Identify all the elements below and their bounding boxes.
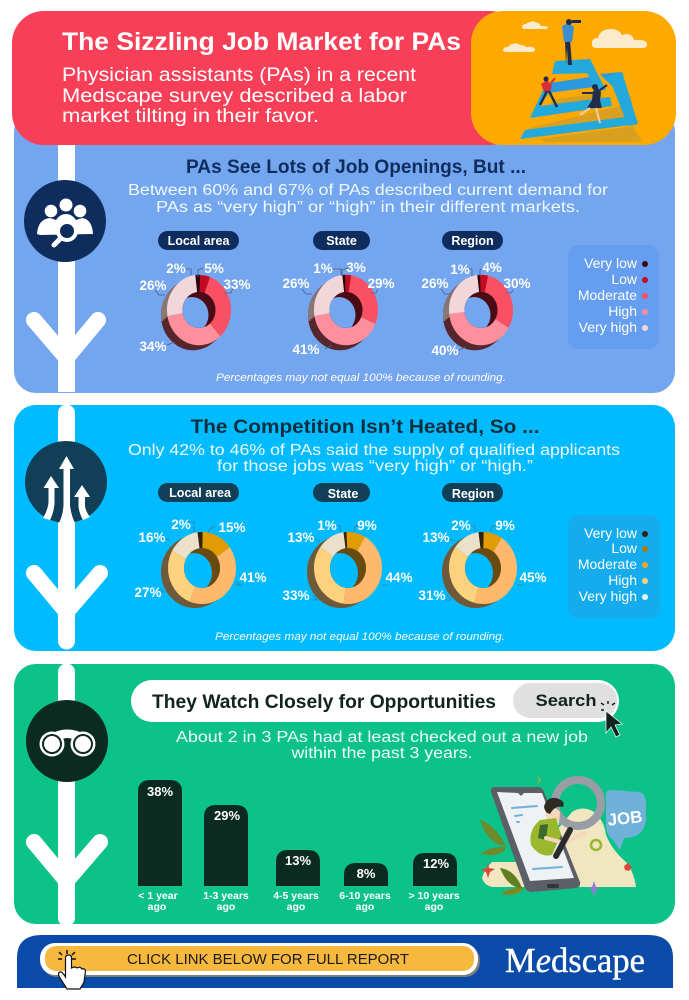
heading: job openings: PAs See Lots of Job Openings, But ... — [186, 157, 526, 178]
donut chart: state demand: State — [326, 234, 357, 248]
bar: 6 to 10 years — [339, 863, 391, 913]
legend: demand — [568, 245, 659, 349]
icon: people with magnifier — [24, 180, 106, 262]
panel: watching for opportunities — [14, 664, 675, 924]
text: checking out jobs: within the past 3 years. — [290, 745, 472, 762]
panel: competition — [14, 405, 675, 651]
donut chart: region demand: 26% — [421, 276, 449, 291]
donut chart: state demand: 3% — [346, 260, 366, 275]
text: demand description: Between 60% and 67% of PAs described current demand for — [128, 182, 608, 199]
panel: footer call to action — [17, 935, 673, 989]
bar: 4 to 5 years: ago — [287, 901, 305, 913]
footnote: rounding: Percentages may not equal 100% because of rounding. — [216, 372, 506, 384]
donut chart: region supply: 9% — [495, 518, 515, 533]
donut chart: state supply: 44% — [385, 570, 413, 585]
button: click link: CLICK LINK BELOW FOR FULL REPORT — [127, 952, 409, 968]
bar: more than 10 years: ago — [425, 901, 443, 913]
bar: 4 to 5 years: 13% — [285, 853, 311, 868]
text: demand description: PAs as “very high” or “high” in their different markets. — [156, 199, 580, 216]
legend: supply — [568, 515, 660, 618]
legend: demand: Moderate — [578, 287, 637, 303]
legend: supply: Very low — [584, 525, 638, 541]
donut chart: local area supply — [134, 483, 267, 602]
donut chart: state supply: State — [328, 487, 358, 501]
donut chart: state demand: 1% — [313, 261, 333, 276]
text: intro — [62, 64, 417, 127]
legend: supply: Very high — [579, 588, 637, 604]
legend: demand: Low — [611, 271, 638, 287]
donut chart: region supply: 31% — [418, 588, 446, 603]
donut chart: local area demand: 33% — [223, 277, 251, 292]
donut chart: local area demand — [139, 231, 251, 354]
donut chart: region demand: 40% — [431, 343, 459, 358]
icon: cursor click — [601, 701, 622, 737]
donut chart: state demand: 26% — [282, 276, 310, 291]
illustration: phone job search: JOB — [607, 807, 643, 830]
donut chart: local area supply: 16% — [138, 530, 166, 545]
donut chart: state supply — [282, 483, 413, 603]
text: checking out jobs: About 2 in 3 PAs had at least checked out a new job — [176, 729, 588, 746]
donut chart: region demand: 1% — [450, 262, 470, 277]
donut chart: local area demand: 26% — [139, 278, 167, 293]
donut chart: local area supply: 2% — [171, 517, 191, 532]
text: intro: Medscape survey described a labor — [62, 85, 408, 107]
legend: demand: High — [608, 303, 637, 319]
bar: less than 1 year: ago — [148, 901, 166, 913]
donut chart: state supply: 13% — [287, 530, 315, 545]
bar: 4 to 5 years: 4-5 years — [273, 890, 319, 902]
text: supply description: for those jobs was “very high” or “high.” — [217, 458, 533, 475]
donut chart: region supply — [418, 483, 547, 603]
bar chart: time since last look — [138, 780, 460, 913]
illustration: people climbing pyramid — [471, 11, 676, 145]
donut chart: local area demand: 5% — [204, 261, 224, 276]
donut chart: local area supply: 41% — [239, 570, 267, 585]
search bar heading: They Watch Closely for Opportunities — [152, 692, 496, 713]
donut chart: local area demand: 34% — [139, 339, 167, 354]
panel: header — [12, 11, 676, 145]
legend: supply: Low — [611, 540, 638, 556]
donut chart: state supply: 1% — [317, 518, 337, 533]
bar: 1 to 3 years: ago — [217, 901, 235, 913]
bar: 4 to 5 years — [273, 850, 320, 913]
donut chart: state demand: 41% — [292, 342, 320, 357]
text: intro: market tilting in their favor. — [62, 105, 319, 127]
donut chart: region supply: 45% — [519, 570, 547, 585]
bar: less than 1 year — [138, 780, 182, 913]
bar: less than 1 year: 38% — [147, 784, 173, 799]
donut chart: region supply: Region — [452, 487, 494, 501]
bar: 1 to 3 years — [203, 805, 249, 913]
legend: demand: Very low — [584, 255, 638, 271]
connector arrow: section 3 — [34, 672, 100, 918]
bar: less than 1 year: < 1 year — [138, 890, 178, 902]
legend: supply: High — [608, 572, 637, 588]
text: supply description: Only 42% to 46% of PAs said the supply of qualified applicants — [128, 442, 620, 459]
search bar heading: Search — [536, 691, 596, 710]
logo: Medscape: Medscape — [505, 941, 645, 980]
donut chart: state demand: 29% — [367, 276, 395, 291]
panel: job openings — [14, 110, 675, 393]
donut chart: local area supply: Local area — [169, 486, 232, 500]
icon: arrows going up — [25, 441, 107, 523]
donut chart: local area demand: 2% — [166, 261, 186, 276]
donut chart: region demand: 30% — [503, 276, 531, 291]
legend: supply: Moderate — [578, 556, 637, 572]
donut chart: local area supply: 15% — [218, 520, 246, 535]
donut chart: region demand: Region — [451, 234, 494, 248]
donut chart: state demand — [282, 231, 395, 357]
donut chart: region demand: 4% — [482, 260, 502, 275]
donut chart: region supply: 13% — [422, 530, 450, 545]
donut chart: state supply: 33% — [282, 588, 310, 603]
title: The Sizzling Job Market for PAs — [62, 28, 461, 56]
text: intro: Physician assistants (PAs) in a recent — [62, 64, 417, 86]
bar: more than 10 years: > 10 years — [408, 890, 460, 902]
bar: 1 to 3 years: 1-3 years — [203, 890, 249, 902]
text: checking out jobs — [176, 729, 588, 762]
bar: 1 to 3 years: 29% — [214, 808, 240, 823]
donut chart: local area demand: Local area — [168, 234, 230, 248]
bar: 6 to 10 years: 8% — [357, 866, 376, 881]
bar: 6 to 10 years: 6-10 years — [339, 890, 391, 902]
donut chart: state supply: 9% — [357, 518, 377, 533]
heading: competition: The Competition Isn’t Heated, So ... — [190, 417, 540, 438]
icon: clicking hand — [58, 950, 86, 989]
text: supply description — [128, 442, 620, 475]
button: click link — [40, 943, 480, 977]
text: demand description — [128, 182, 608, 216]
search bar heading — [131, 680, 619, 722]
connector arrow: section 1 — [34, 140, 98, 392]
bar: 6 to 10 years: ago — [356, 901, 374, 913]
bar: more than 10 years — [408, 853, 460, 913]
footnote: rounding: Percentages may not equal 100% because of rounding. — [215, 631, 505, 643]
icon: binoculars — [26, 700, 108, 782]
donut chart: local area supply: 27% — [134, 585, 162, 600]
connector arrow: section 2 — [34, 413, 100, 641]
bar: more than 10 years: 12% — [423, 856, 449, 871]
donut chart: region supply: 2% — [451, 518, 471, 533]
legend: demand: Very high — [579, 319, 637, 335]
donut chart: region demand — [421, 231, 531, 358]
illustration: phone job search — [480, 775, 646, 897]
